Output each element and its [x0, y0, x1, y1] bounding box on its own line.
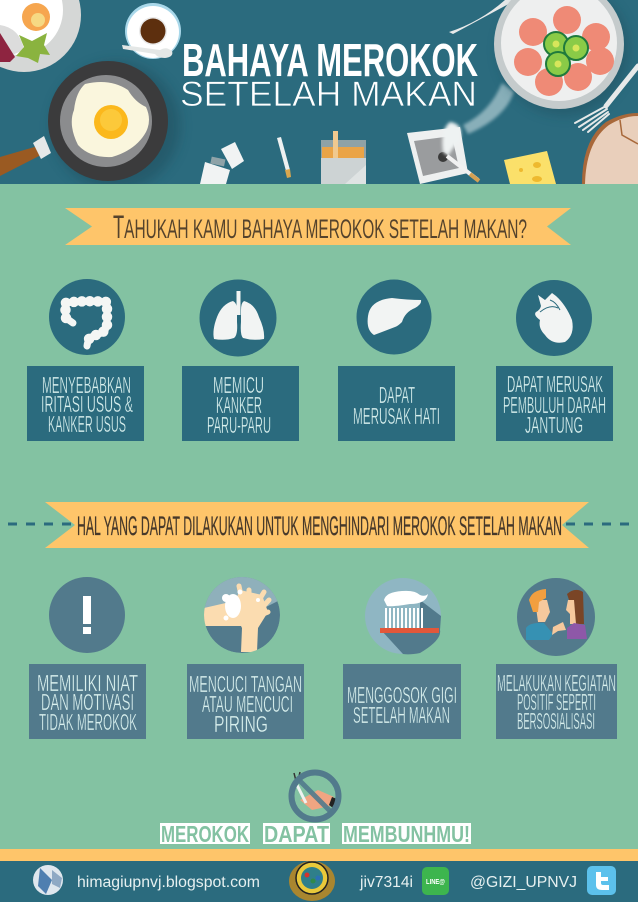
twitter account: @GIZI_UPNVJ [470, 874, 577, 891]
text box: wash hands: MENCUCI TANGAN [189, 671, 302, 697]
banner: prevention heading [45, 502, 589, 548]
text box: motivation: TIDAK MEROKOK [39, 709, 137, 735]
text box: liver risk: DAPAT [379, 382, 415, 408]
icon: frying pan with egg [0, 61, 180, 190]
icon: coffee cup [122, 3, 181, 59]
text box: colon risk [27, 366, 144, 441]
icon: two people talking [517, 578, 595, 656]
text box: colon risk: MENYEBABKAN [42, 372, 131, 398]
dashed divider right [566, 522, 638, 526]
icon: line [422, 867, 449, 895]
title [182, 44, 478, 106]
icon: lungs [200, 280, 276, 356]
title: SETELAH MAKAN [180, 74, 477, 114]
slogan [160, 821, 471, 847]
text box: heart risk [496, 366, 613, 441]
text box: motivation: MEMILIKI NIAT [37, 670, 138, 696]
icon: no smoking sign [292, 772, 338, 820]
text box: motivation [29, 664, 146, 739]
footer accent band [0, 849, 638, 861]
icon: lighter [200, 142, 244, 184]
text box: liver risk [338, 366, 455, 441]
text box: wash hands: PIRING [214, 711, 268, 737]
text box: lung risk [182, 366, 299, 441]
icon: liver [356, 280, 432, 354]
text box: liver risk: MERUSAK HATI [353, 403, 440, 429]
icon: washing hands [204, 577, 280, 653]
text box: colon risk: KANKER USUS [48, 411, 126, 437]
icon: fork [575, 66, 638, 132]
icon: cigarette pack [321, 131, 366, 184]
icon: globe [33, 865, 63, 895]
icon: knife [449, 0, 516, 34]
icon: heart [516, 280, 592, 356]
text box: socialise [496, 664, 617, 739]
footer panel [0, 861, 638, 902]
icon: toothbrush [365, 578, 441, 654]
text box: lung risk: MEMICU [213, 372, 264, 398]
icon: organisation emblem [289, 861, 335, 901]
slogan: MEMBUNHMU! [343, 821, 470, 847]
text box: wash hands [187, 664, 304, 739]
website: himagiupnvj.blogspot.com [77, 874, 260, 891]
icon: cheese [504, 151, 556, 184]
dashed divider left [8, 522, 72, 526]
icon: exclamation mark [49, 577, 125, 653]
slogan: MEROKOK [161, 821, 249, 847]
icon: smoke [463, 83, 514, 134]
icon: ashtray [407, 122, 479, 184]
header panel [0, 0, 638, 190]
icon: intestine [49, 279, 125, 355]
text box: lung risk: PARU-PARU [207, 412, 271, 438]
icon: breakfast plate [0, 0, 81, 72]
text box: lung risk: KANKER [216, 392, 262, 418]
title: BAHAYA MEROKOK [182, 34, 478, 86]
icon: line: LINE@ [426, 877, 445, 886]
text box: motivation: DAN MOTIVASI [41, 689, 134, 715]
slogan: DAPAT [264, 821, 329, 847]
icon: bread [582, 113, 638, 184]
text box: brush teeth [343, 664, 461, 739]
icon: twitter [587, 866, 616, 895]
icon: cigarette [277, 137, 291, 178]
line account: jiv7314i [359, 874, 413, 891]
icon: plate with salami [494, 0, 629, 115]
text box: brush teeth: MENGGOSOK GIGI [347, 682, 457, 708]
text box: heart risk: JANTUNG [525, 412, 583, 438]
text box: colon risk: IRITASI USUS & [41, 391, 133, 417]
text box: wash hands: ATAU MENCUCI [202, 691, 293, 717]
panel: health risks [27, 279, 613, 441]
panel: prevention tips [29, 577, 617, 739]
text box: brush teeth: SETELAH MAKAN [353, 702, 450, 728]
